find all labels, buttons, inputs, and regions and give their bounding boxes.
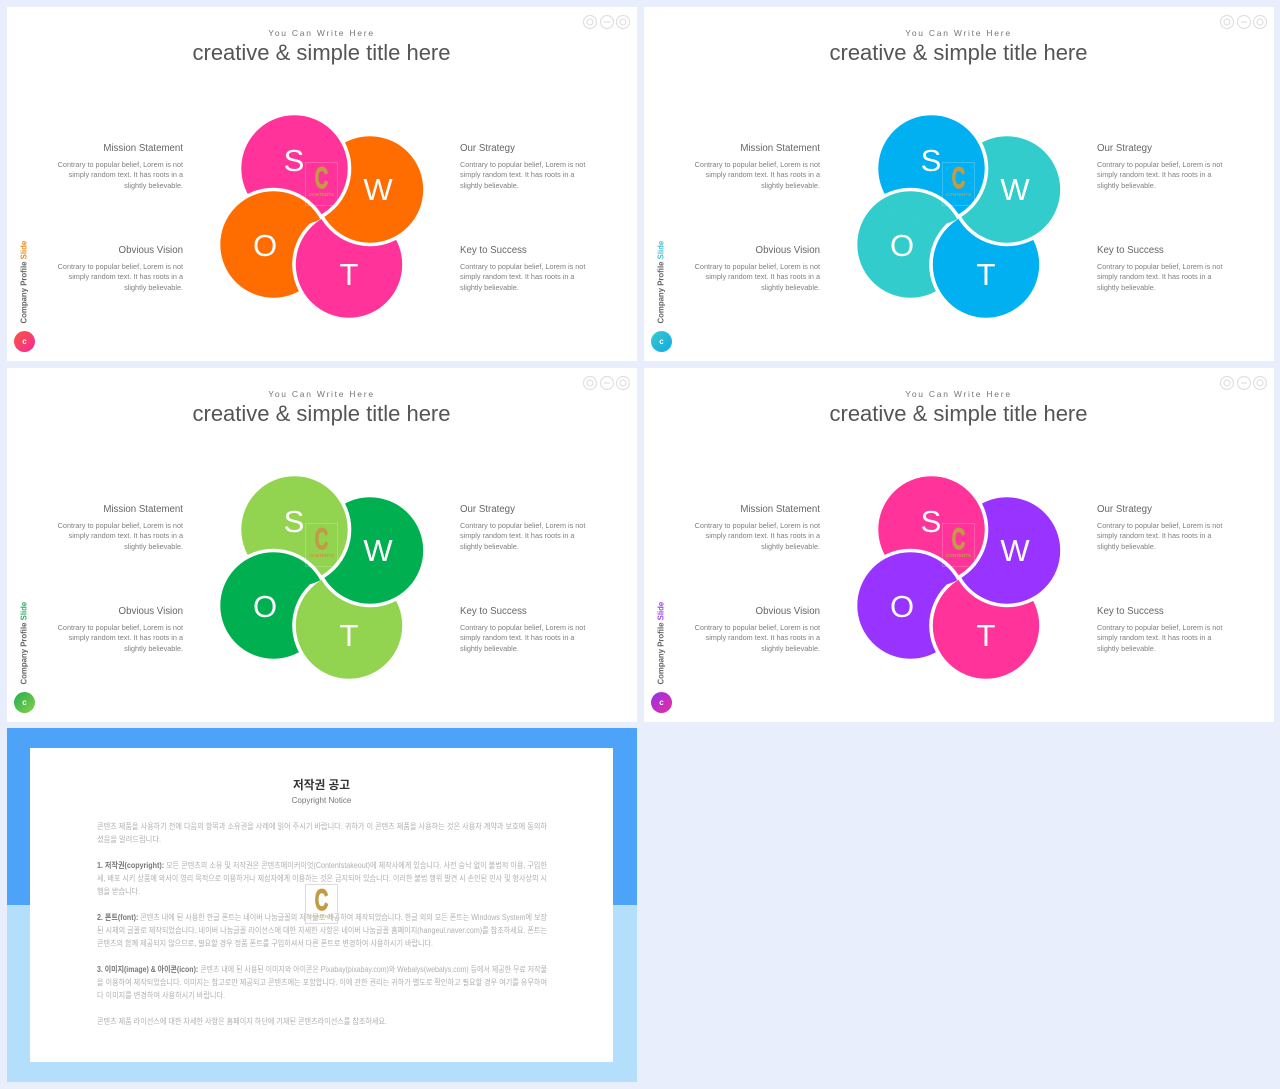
text: Our Strategy: slightly believable. [1097, 181, 1156, 190]
SWOT pinwheel diagram: W [1000, 533, 1030, 568]
vertical label: Company Profile Slide [656, 601, 665, 684]
text: Key to Success: slightly believable. [1097, 644, 1156, 653]
text: Obvious Vision [695, 245, 820, 292]
social icons [583, 15, 630, 29]
text: Our Strategy: Contrary to popular belief, Lorem is not [1097, 521, 1222, 530]
logo badge [14, 692, 35, 713]
text: Key to Success: slightly believable. [1097, 283, 1156, 292]
social icons [583, 376, 630, 390]
text: Mission Statement: slightly believable. [761, 181, 820, 190]
SWOT pinwheel diagram: T [340, 257, 359, 292]
text: Obvious Vision: slightly believable. [124, 283, 183, 292]
text: Mission Statement: simply random text. It has roots in a [69, 170, 183, 179]
copyright heading: 저작권 공고 [293, 779, 350, 792]
text: Obvious Vision: Obvious Vision [119, 245, 183, 256]
text: Key to Success: simply random text. It has roots in a [1097, 633, 1211, 642]
text: Our Strategy: Contrary to popular belief, Lorem is not [460, 160, 585, 169]
text: Obvious Vision [58, 606, 183, 653]
panel: magenta and purple SWOT slide [644, 368, 1274, 722]
text: Key to Success: Contrary to popular belief, Lorem is not [460, 262, 585, 271]
text: Our Strategy [1097, 504, 1222, 551]
watermark logo on copyright card [305, 884, 338, 924]
text: Mission Statement: Contrary to popular belief, Lorem is not [58, 160, 183, 169]
text: Key to Success [1097, 606, 1222, 653]
title: creative & simple title here [192, 40, 450, 65]
vertical label: Company Profile Slide [19, 601, 28, 684]
watermark logo: C [315, 523, 328, 556]
watermark logo on copyright card: CONTENTS [309, 914, 334, 919]
copyright body text [97, 821, 548, 1026]
logo badge [651, 331, 672, 352]
logo badge: c [22, 698, 27, 707]
text: Obvious Vision: simply random text. It has roots in a [69, 633, 183, 642]
text: Key to Success: slightly believable. [460, 644, 519, 653]
SWOT pinwheel diagram: O [890, 228, 914, 263]
vertical label: Company Profile Slide [656, 240, 665, 323]
text: Key to Success: Key to Success [1097, 606, 1164, 617]
text: Key to Success [1097, 245, 1222, 292]
copyright body text: 콘텐츠 제품 라이선스에 대한 자세한 사항은 홈페이지 하단에 기재된 콘텐츠라이선스를 참조하세요. [97, 1016, 387, 1026]
text: Mission Statement: simply random text. It has roots in a [706, 170, 820, 179]
subtitle: You Can Write Here [905, 388, 1012, 398]
panel: green SWOT slide [7, 368, 637, 722]
copyright body text: 된 시체의 글꼴로 제작되었습니다. 네이버 나눔글꼴 라이선스에 대한 자세한 사항은 네이버 나눔글꼴 홈페이지(hangeul.naver.com)를 참조하세요. 폰트는 [97, 925, 547, 935]
text: Obvious Vision: slightly believable. [124, 644, 183, 653]
SWOT pinwheel diagram: W [363, 533, 393, 568]
text: Obvious Vision: Contrary to popular belief, Lorem is not [58, 623, 183, 632]
text: Key to Success [460, 606, 586, 653]
text: Key to Success: Key to Success [460, 245, 527, 256]
text: Obvious Vision: Obvious Vision [756, 245, 820, 256]
text: Obvious Vision: simply random text. It has roots in a [706, 272, 820, 281]
text: Our Strategy: simply random text. It has roots in a [1097, 170, 1211, 179]
text: Mission Statement [695, 504, 820, 551]
copyright body text: 1. 저작권(copyright): 모든 콘텐츠의 소유 및 저작권은 콘텐츠메이커이엇(Contentstakeout)에 제작사에게 있습니다. 사전 승낙 없이 불법적 이용, 구입한 [97, 860, 548, 870]
text: Our Strategy: Contrary to popular belief, Lorem is not [1097, 160, 1222, 169]
text: Mission Statement: Mission Statement [103, 143, 183, 154]
watermark logo [942, 523, 975, 567]
text: Key to Success [460, 245, 586, 292]
SWOT pinwheel diagram: S [284, 504, 304, 539]
watermark logo [305, 162, 338, 206]
text: Mission Statement: Contrary to popular belief, Lorem is not [695, 521, 820, 530]
text: Our Strategy: Contrary to popular belief, Lorem is not [460, 521, 585, 530]
SWOT pinwheel diagram: S [284, 143, 304, 178]
text: Obvious Vision: slightly believable. [761, 644, 820, 653]
text: Our Strategy: slightly believable. [1097, 542, 1156, 551]
text: Obvious Vision: Contrary to popular belief, Lorem is not [695, 262, 820, 271]
text: Mission Statement: Mission Statement [740, 143, 820, 154]
vertical label: Company Profile Slide [19, 240, 28, 323]
SWOT pinwheel diagram: W [363, 172, 393, 207]
SWOT pinwheel diagram: S [921, 504, 941, 539]
copyright white card [30, 748, 613, 1062]
panel: pink and orange SWOT slide [7, 7, 637, 361]
SWOT pinwheel diagram [857, 476, 1060, 679]
copyright body text: 세, 배포 시키 상품에 와서이 영리 목적으로 이용하거나 제삼자에게 이용하는 것은 금지되어 있습니다. 이러한 불법 행위 발견 시 손인된 민사 및 형사상의 시 [97, 873, 547, 883]
logo badge: c [22, 337, 27, 346]
text: Key to Success: simply random text. It has roots in a [1097, 272, 1211, 281]
text: Our Strategy: slightly believable. [460, 181, 519, 190]
copyright body text: 3. 이미지(image) & 아이콘(icon): 콘텐츠 내에 된 사용된 이미지와 아이콘은 Pixabay(pixabay.com)와 Webalys(webalys.com) 등에서 제공한 무료 저작물 [97, 964, 547, 974]
text: Mission Statement: Contrary to popular belief, Lorem is not [695, 160, 820, 169]
text: Key to Success: simply random text. It has roots in a [460, 633, 574, 642]
SWOT pinwheel diagram: S [921, 143, 941, 178]
text: Mission Statement: slightly believable. [124, 181, 183, 190]
copyright body text: 을 이용하여 제작되었습니다. 이미지는 참고로만 제공되고 콘텐츠에는 포함합니다. 이에 관한 권리는 귀하가 별도로 확인하고 필요할 경우 여기를 유무하여 [97, 977, 547, 987]
text: Obvious Vision: slightly believable. [761, 283, 820, 292]
text: Key to Success: slightly believable. [460, 283, 519, 292]
text: Obvious Vision [695, 606, 820, 653]
watermark logo: C [952, 162, 965, 195]
copyright body text: 콘텐츠 제품을 사용하기 전에 다음의 항목과 소유권을 사례에 읽어 주시기 바랍니다. 귀하가 이 콘텐츠 제품을 사용하는 것은 사용자 계약과 보호에 동의하 [97, 821, 548, 831]
text: Our Strategy: simply random text. It has roots in a [1097, 531, 1211, 540]
text: Mission Statement [695, 143, 820, 190]
social icons [1220, 15, 1267, 29]
logo badge [651, 692, 672, 713]
logo badge: c [659, 337, 664, 346]
text: Mission Statement: simply random text. It has roots in a [69, 531, 183, 540]
SWOT pinwheel diagram: W [1000, 172, 1030, 207]
text: Obvious Vision: Obvious Vision [119, 606, 183, 617]
copyright subheading: Copyright Notice [292, 796, 351, 805]
copyright body text: 행을 받습니다. [97, 886, 140, 896]
text: Key to Success: Contrary to popular belief, Lorem is not [460, 623, 585, 632]
SWOT pinwheel diagram [220, 476, 424, 679]
SWOT pinwheel diagram: T [977, 257, 996, 292]
copyright body text: 콘텐츠의 함께 제공되지 않으므로, 필요할 경우 정품 폰트를 구입하셔서 다른 폰트로 변경하여 사용하시기 바랍니다. [97, 938, 433, 948]
subtitle: You Can Write Here [268, 388, 375, 398]
text: Obvious Vision: Obvious Vision [756, 606, 820, 617]
SWOT pinwheel diagram: O [253, 228, 277, 263]
text: Our Strategy: Our Strategy [1097, 504, 1152, 515]
watermark logo: CONTENTS [946, 553, 971, 558]
copyright body text: 2. 폰트(font): 콘텐츠 내에 된 사용한 한글 폰트는 네이버 나눔글꼴의 저작물로 제공하여 제작되었습니다. 한글 외의 모든 폰트는 Windows System에 보장 [97, 912, 548, 922]
text: Mission Statement: slightly believable. [124, 542, 183, 551]
text: Key to Success: Contrary to popular belief, Lorem is not [1097, 262, 1222, 271]
title: creative & simple title here [830, 401, 1088, 426]
subtitle: You Can Write Here [268, 28, 375, 38]
text: Mission Statement: Contrary to popular belief, Lorem is not [58, 521, 183, 530]
watermark logo: C [315, 162, 328, 195]
text: Obvious Vision: simply random text. It has roots in a [69, 272, 183, 281]
panel: blue and teal SWOT slide [644, 7, 1274, 361]
SWOT pinwheel diagram: T [340, 618, 359, 653]
text: Our Strategy: slightly believable. [460, 542, 519, 551]
SWOT pinwheel diagram [220, 115, 424, 318]
text: Obvious Vision [58, 245, 183, 292]
SWOT pinwheel diagram: O [253, 589, 277, 624]
text: Mission Statement: slightly believable. [761, 542, 820, 551]
copyright body text: 셨음을 알려드립니다. [97, 834, 161, 844]
text: Key to Success: Key to Success [460, 606, 527, 617]
watermark logo [942, 162, 975, 206]
copyright body text: 다 이미지를 변경하여 사용하시기 바랍니다. [97, 990, 225, 1000]
text: Mission Statement [58, 504, 183, 551]
text: Mission Statement: Mission Statement [740, 504, 820, 515]
text: Key to Success: Key to Success [1097, 245, 1164, 256]
watermark logo [305, 523, 338, 567]
text: Obvious Vision: simply random text. It has roots in a [706, 633, 820, 642]
watermark logo on copyright card: C [315, 884, 328, 917]
social icons [1220, 376, 1267, 390]
text: Our Strategy [1097, 143, 1222, 190]
watermark logo: C [952, 523, 965, 556]
SWOT pinwheel diagram: T [977, 618, 996, 653]
SWOT pinwheel diagram [857, 115, 1060, 318]
watermark logo: CONTENTS [309, 553, 334, 558]
title: creative & simple title here [830, 40, 1088, 65]
text: Obvious Vision: Contrary to popular belief, Lorem is not [58, 262, 183, 271]
panel: copyright notice [7, 728, 637, 1082]
text: Key to Success: Contrary to popular belief, Lorem is not [1097, 623, 1222, 632]
title: creative & simple title here [192, 401, 450, 426]
logo badge [14, 331, 35, 352]
text: Our Strategy: Our Strategy [1097, 143, 1152, 154]
subtitle: You Can Write Here [905, 28, 1012, 38]
text: Our Strategy: Our Strategy [460, 143, 515, 154]
text: Our Strategy: simply random text. It has roots in a [460, 531, 574, 540]
text: Mission Statement: Mission Statement [103, 504, 183, 515]
text: Our Strategy: Our Strategy [460, 504, 515, 515]
text: Mission Statement [58, 143, 183, 190]
text: Our Strategy: simply random text. It has roots in a [460, 170, 574, 179]
logo badge: c [659, 698, 664, 707]
text: Our Strategy [460, 143, 586, 190]
watermark logo: CONTENTS [946, 192, 971, 197]
SWOT pinwheel diagram: O [890, 589, 914, 624]
text: Mission Statement: simply random text. It has roots in a [706, 531, 820, 540]
text: Obvious Vision: Contrary to popular belief, Lorem is not [695, 623, 820, 632]
watermark logo: CONTENTS [309, 192, 334, 197]
text: Our Strategy [460, 504, 586, 551]
text: Key to Success: simply random text. It has roots in a [460, 272, 574, 281]
